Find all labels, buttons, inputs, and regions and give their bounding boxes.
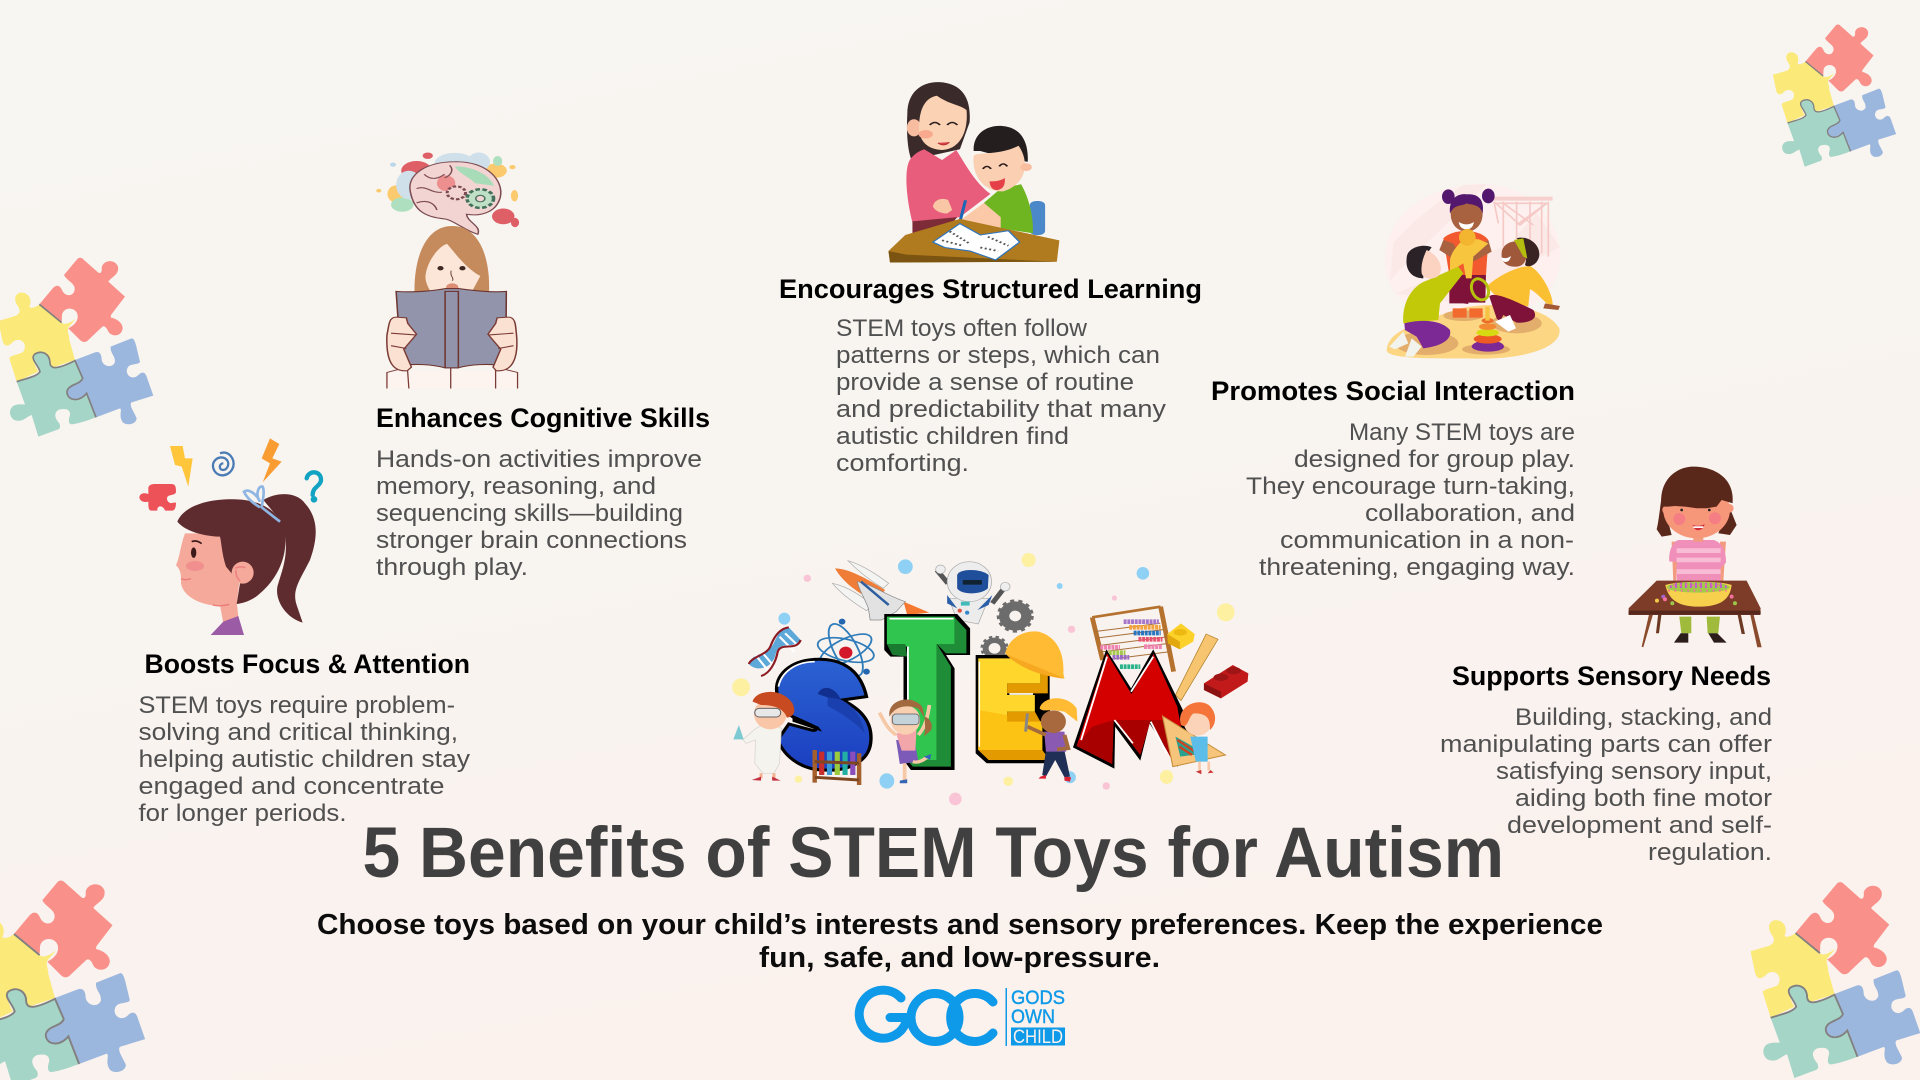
call to action: fun, safe, and low-pressure. <box>759 942 1160 974</box>
body text <box>836 315 1166 477</box>
icon: mother helping boy study <box>888 82 1059 262</box>
body text: communication in a non- <box>1280 527 1574 554</box>
decoration: puzzle pieces bottom left <box>0 880 145 1080</box>
body text: and predictability that many <box>836 396 1166 423</box>
call to action: Choose toys based on your child’s interests and sensory preferences. Keep the experience <box>317 909 1603 941</box>
body text: autistic children find <box>836 423 1069 450</box>
logo wordmark: GODS <box>1011 988 1065 1009</box>
heading: Enhances Cognitive Skills <box>376 403 710 433</box>
test tube rack <box>815 750 859 785</box>
body text: engaged and concentrate <box>138 773 444 800</box>
gears <box>982 601 1032 660</box>
icon: three children playing <box>1385 184 1561 359</box>
body text: collaboration, and <box>1365 500 1575 527</box>
body text: provide a sense of routine <box>836 369 1134 396</box>
letter S <box>777 659 871 770</box>
body text: regulation. <box>1648 839 1772 866</box>
body text: Many STEM toys are <box>1349 419 1575 446</box>
panel: promotes social interaction <box>1211 184 1575 581</box>
logo: Gods Own Child <box>859 988 1065 1048</box>
panel: encourages structured learning <box>779 82 1202 477</box>
body text: sequencing skills—building <box>376 500 683 527</box>
letter M <box>1073 649 1192 769</box>
body text: Hands-on activities improve <box>376 446 702 473</box>
icon: girl with sensory bowl at table <box>1629 467 1762 647</box>
body text: threatening, engaging way. <box>1259 554 1575 581</box>
body text: They encourage turn-taking, <box>1246 473 1575 500</box>
pencil ruler <box>1175 634 1218 701</box>
DNA helix <box>749 627 801 676</box>
logo wordmark: CHILD <box>1013 1027 1063 1048</box>
icon: girl with distraction symbols <box>139 438 321 635</box>
body text: patterns or steps, which can <box>836 342 1160 369</box>
set square <box>1162 716 1225 767</box>
letter E <box>976 655 1052 763</box>
heading: Encourages Structured Learning <box>779 274 1202 304</box>
panel: enhances cognitive skills <box>376 152 710 581</box>
yellow block <box>1167 623 1195 649</box>
atom <box>815 619 877 680</box>
logo wordmark: OWN <box>1011 1007 1055 1028</box>
letter T <box>884 614 970 770</box>
body text: Building, stacking, and <box>1515 704 1772 731</box>
body text: STEM toys often follow <box>836 315 1088 342</box>
body text: comforting. <box>836 450 969 477</box>
logo divider <box>1006 988 1007 1046</box>
decoration: puzzle pieces top right <box>1773 25 1896 167</box>
body text: memory, reasoning, and <box>376 473 656 500</box>
body text: STEM toys require problem- <box>138 692 455 719</box>
body text <box>138 692 470 827</box>
decoration: puzzle pieces bottom right <box>1751 882 1920 1078</box>
body text <box>1246 419 1575 581</box>
title: 5 Benefits of STEM Toys for Autism <box>362 814 1504 893</box>
body text: manipulating parts can offer <box>1440 731 1772 758</box>
panel: boosts focus and attention <box>138 438 470 827</box>
heading: Boosts Focus & Attention <box>144 649 470 679</box>
body text: for longer periods. <box>138 800 346 827</box>
hard hat <box>1005 631 1064 679</box>
abacus <box>1092 607 1174 672</box>
body text: aiding both fine motor <box>1515 785 1772 812</box>
kid scientist <box>733 692 794 781</box>
body text: development and self- <box>1507 812 1772 839</box>
illustration: STEM letters with science icons <box>732 553 1248 805</box>
confetti dots <box>732 553 1235 805</box>
body text <box>1440 704 1772 866</box>
call to action <box>317 909 1603 974</box>
red block <box>1204 665 1248 698</box>
heading: Promotes Social Interaction <box>1211 376 1575 406</box>
kid with wrench <box>1026 698 1077 782</box>
body text: designed for group play. <box>1294 446 1575 473</box>
kid with red hair <box>1180 702 1215 774</box>
body text: through play. <box>376 554 528 581</box>
rocket <box>832 561 929 620</box>
robot <box>936 562 1010 624</box>
body text: satisfying sensory input, <box>1496 758 1772 785</box>
body text: helping autistic children stay <box>138 746 470 773</box>
body text: solving and critical thinking, <box>138 719 458 746</box>
heading: Supports Sensory Needs <box>1452 661 1771 691</box>
icon: girl reading with brain and gears <box>376 152 519 389</box>
logo mark GOC <box>859 990 993 1042</box>
body text <box>376 446 702 581</box>
decoration: puzzle pieces left <box>0 258 153 437</box>
panel: supports sensory needs <box>1440 467 1772 866</box>
logo wordmark <box>1011 988 1065 1048</box>
kid with VR headset <box>879 700 932 783</box>
body text: stronger brain connections <box>376 527 687 554</box>
